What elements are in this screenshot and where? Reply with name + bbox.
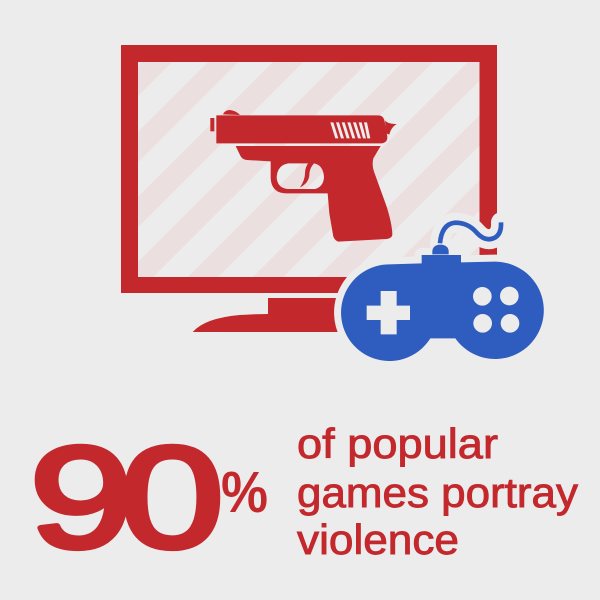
- infographic canvas: [34, 45, 578, 555]
- gun trigger: [300, 162, 314, 187]
- gun rear sight: [210, 118, 214, 131]
- controller buttons: [473, 287, 519, 333]
- controller d-pad: [367, 291, 410, 334]
- icon: game controller: [341, 222, 544, 361]
- controller body: [341, 255, 544, 361]
- icon: computer monitor: [121, 45, 497, 332]
- gun slide: [216, 115, 387, 143]
- monitor frame: [121, 45, 497, 293]
- controller outline halo: [341, 222, 544, 361]
- controller cable: [440, 222, 501, 243]
- percent sign: %: [221, 460, 268, 525]
- caption line 2: games portray: [297, 469, 578, 516]
- gun frame and grip: [236, 146, 392, 242]
- gun hammer: [385, 121, 397, 135]
- icon: handgun: [210, 110, 397, 242]
- gun front bump: [223, 110, 240, 115]
- monitor screen stripes: [138, 62, 480, 277]
- big number: [30, 417, 224, 578]
- big number: 0: [120, 417, 224, 578]
- controller connector: [432, 245, 449, 254]
- statistic: 90%: [30, 417, 268, 578]
- monitor stand: [193, 298, 345, 332]
- caption text: [297, 420, 578, 563]
- caption line 3: violence: [297, 516, 459, 563]
- big number: 9: [30, 417, 134, 578]
- gun slide serrations: [330, 122, 370, 138]
- caption line 1: of popular: [297, 420, 498, 467]
